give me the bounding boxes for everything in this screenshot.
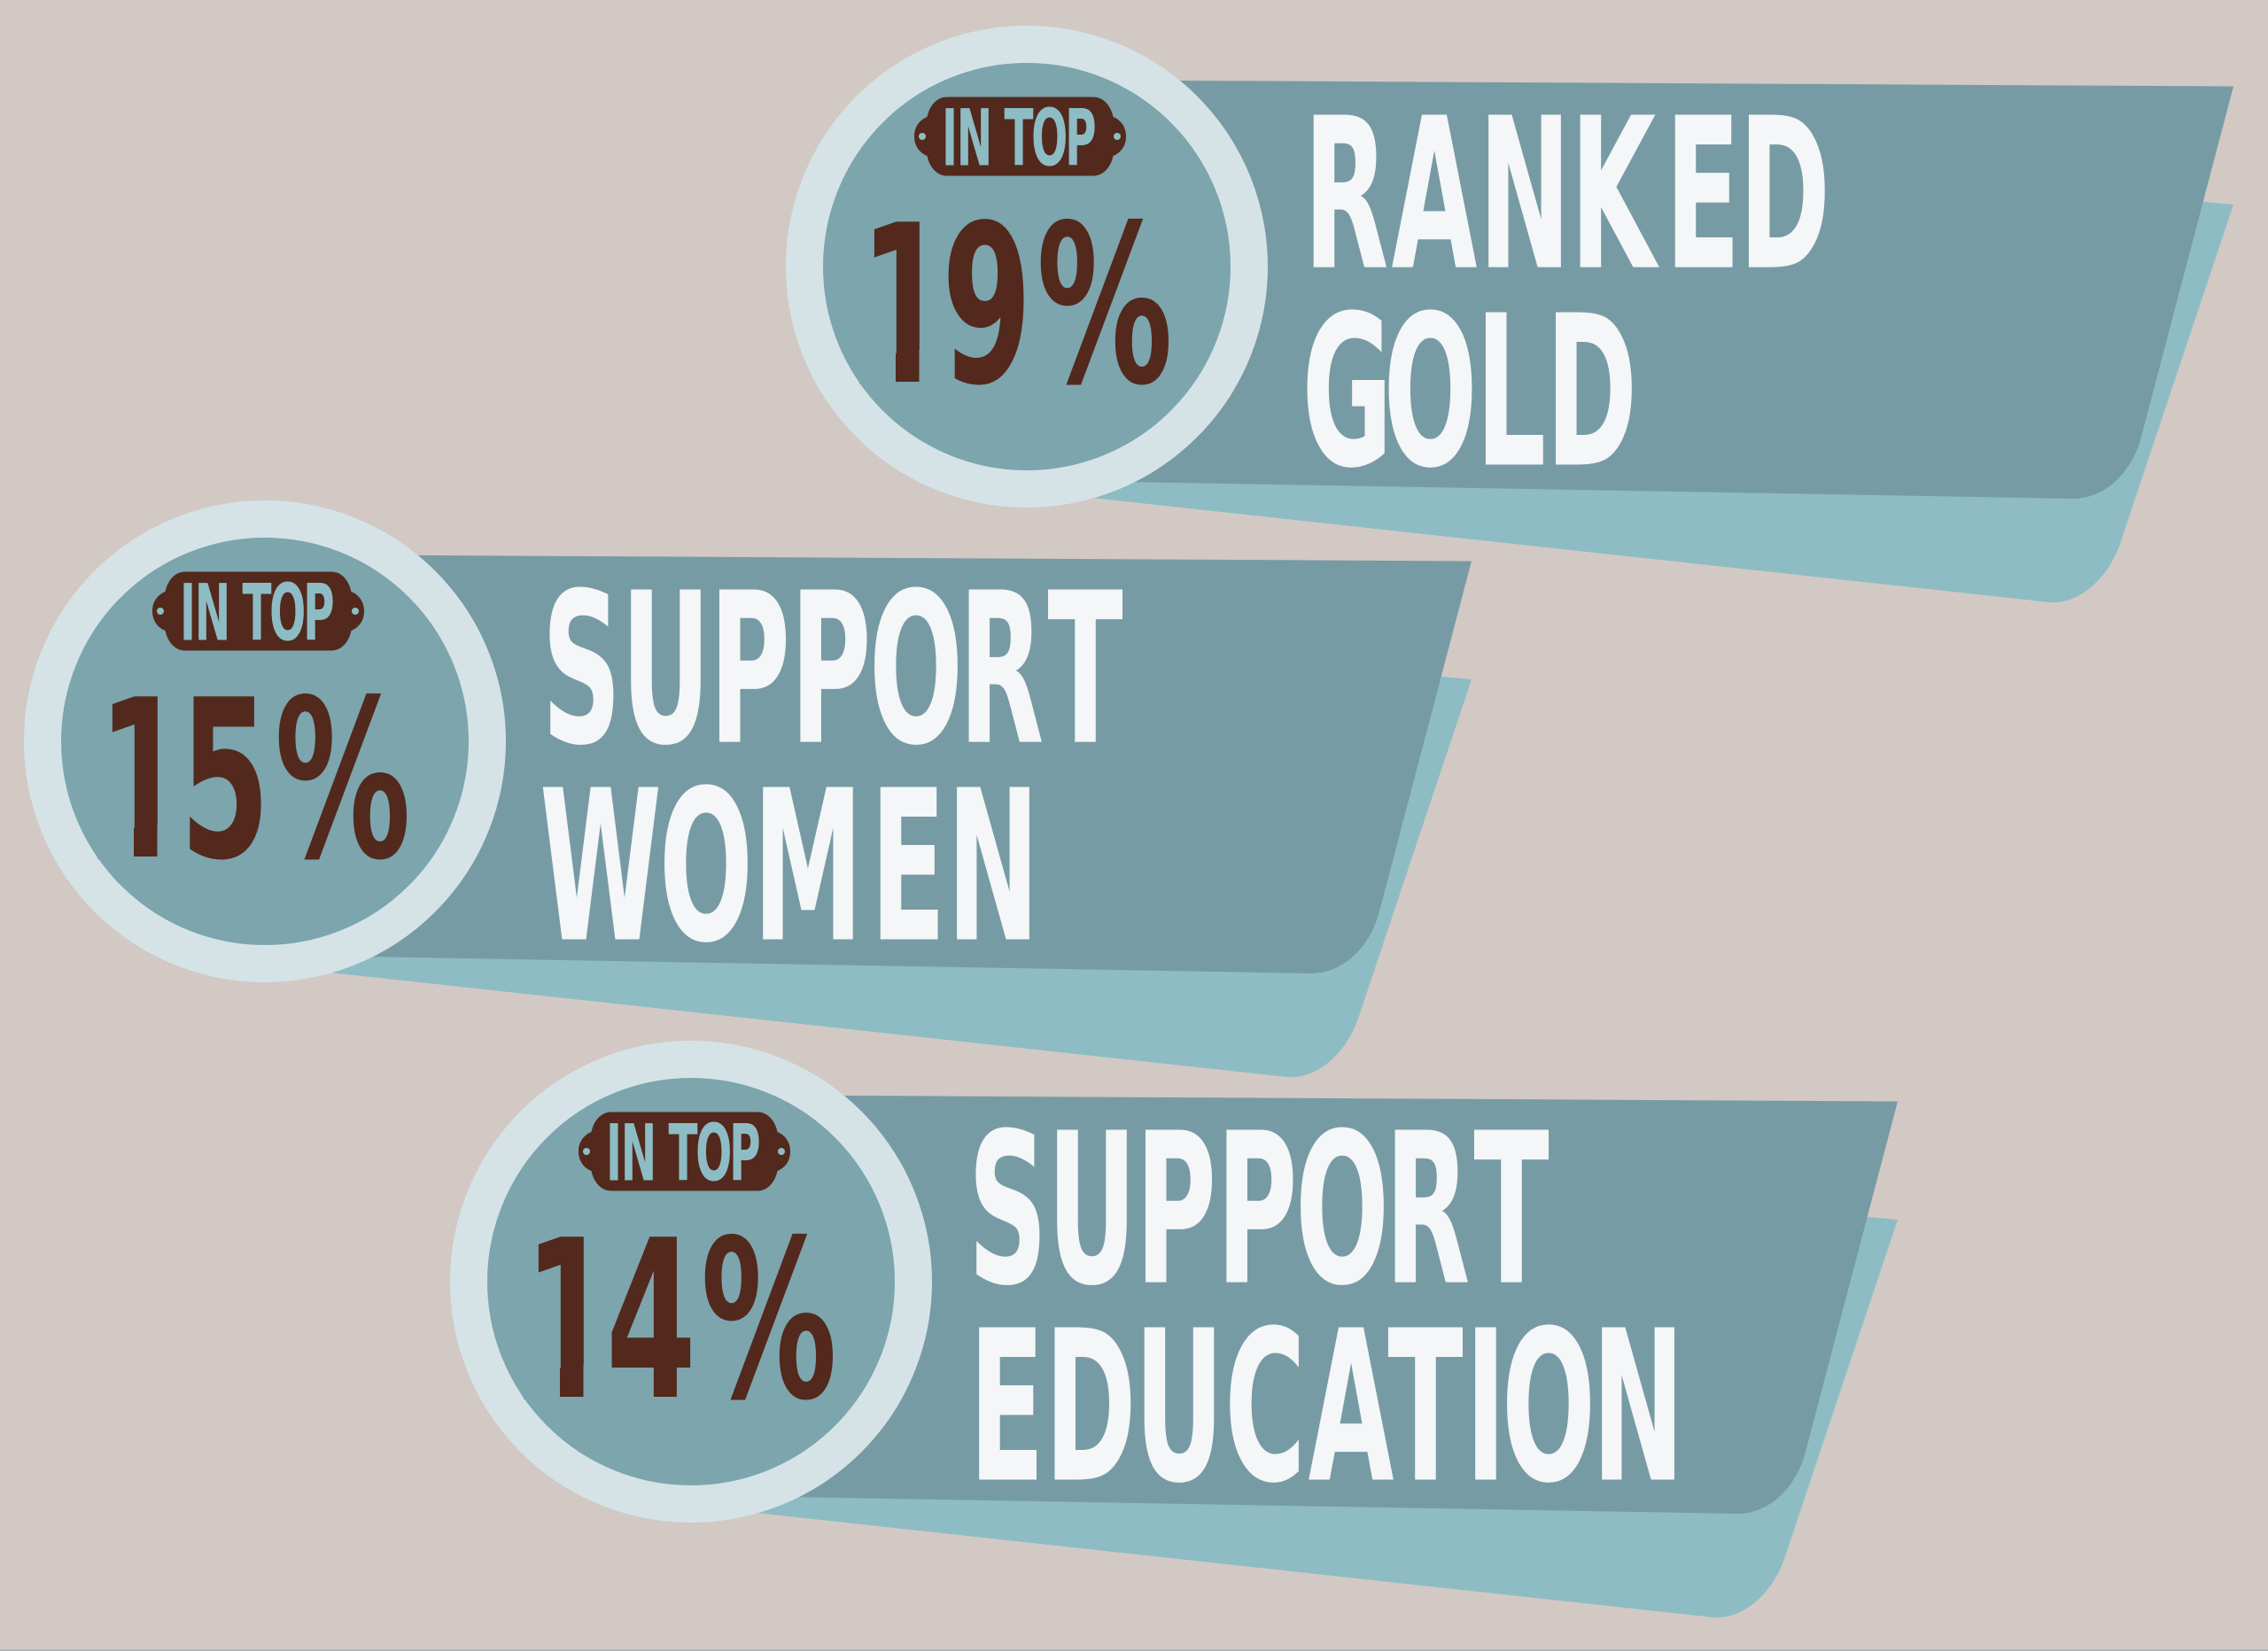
heading: RANKED	[1303, 74, 1830, 317]
heading: EDUCATION	[969, 1286, 1684, 1530]
heading	[540, 548, 1123, 989]
percentage	[524, 1192, 837, 1450]
panel: support women	[43, 519, 1472, 1077]
percentage: %	[1037, 177, 1173, 434]
front ribbon	[265, 554, 1472, 973]
percentage	[859, 177, 1173, 435]
heading: WOMEN	[540, 746, 1039, 989]
in top tag: IN TOP	[180, 568, 335, 658]
panel: ranked gold	[804, 44, 2233, 602]
heading: GOLD	[1301, 271, 1637, 515]
circle badge	[43, 519, 487, 964]
percentage: %	[701, 1192, 837, 1449]
percentage: %	[275, 652, 411, 909]
percentage	[97, 652, 411, 910]
front ribbon	[691, 1095, 1898, 1514]
heading	[1301, 74, 1830, 515]
circle badge	[469, 1059, 913, 1504]
circle badge	[804, 44, 1249, 489]
heading: SUPPORT	[967, 1089, 1550, 1332]
heading: SUPPORT	[541, 548, 1123, 792]
in top tag: IN TOP	[606, 1108, 761, 1198]
in top tag: IN TOP	[942, 93, 1097, 183]
percentage: 14	[524, 1194, 696, 1450]
heading	[967, 1089, 1684, 1530]
percentage: 19	[859, 179, 1032, 435]
back ribbon	[1027, 187, 2233, 602]
back ribbon	[691, 1202, 1898, 1617]
percentage: 15	[97, 654, 270, 910]
panel: support education	[469, 1059, 1898, 1617]
back ribbon	[265, 662, 1472, 1077]
front ribbon	[1027, 80, 2233, 499]
